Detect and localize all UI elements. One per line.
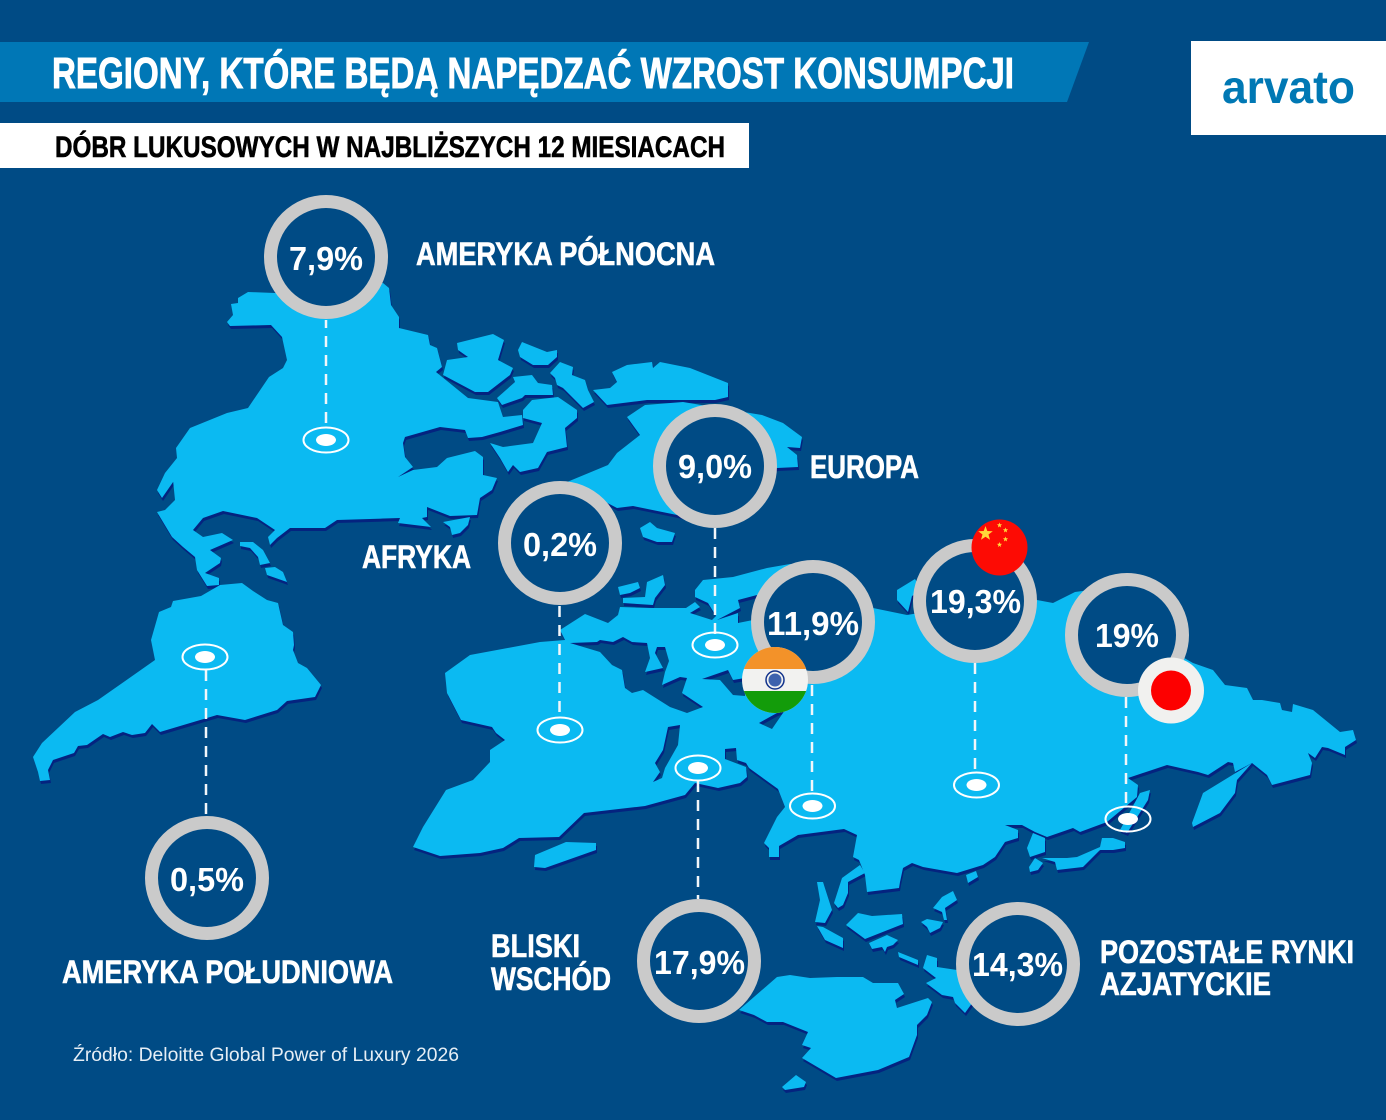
value circle: Ameryka Południowa 0,5% — [152, 822, 262, 934]
value circle: Afryka 0,2%: 0,2% — [523, 526, 597, 563]
island: south 6 — [966, 871, 978, 883]
value circle: Pozostałe rynki azjatyckie 14,3% — [962, 908, 1074, 1020]
label: Bliski Wschód — [491, 928, 611, 997]
landmass: South America — [33, 583, 321, 781]
marker: Europa — [692, 528, 738, 658]
value circle: Chiny 19,3%: 19,3% — [930, 583, 1021, 620]
landmass: Greenland-like — [567, 402, 802, 518]
value circle: Europa 9,0%: 9,0% — [678, 448, 752, 485]
island: arctic 2 — [518, 342, 557, 365]
island: east 2 — [1042, 838, 1125, 870]
marker: Indie — [790, 685, 835, 818]
logo: arvato: arvato — [1222, 61, 1355, 113]
marker: Ameryka Południowa — [182, 644, 228, 816]
island: New Guinea-like — [923, 955, 985, 1013]
island: west 1 — [618, 582, 640, 595]
world map — [33, 283, 1356, 1090]
value circle: Pozostałe rynki azjatyckie 14,3%: 14,3% — [972, 946, 1063, 983]
value circle: Japonia 19% — [1072, 580, 1182, 690]
island: thin strip — [1120, 790, 1150, 833]
island: south 2 — [869, 935, 898, 952]
marker: Ameryka Północna — [304, 320, 348, 452]
island: east 3 — [1029, 858, 1043, 872]
value circle: Chiny 19,3% — [920, 546, 1030, 656]
landmass: North America — [157, 283, 523, 586]
island: arctic narrow — [550, 362, 594, 408]
island: south 3 — [898, 952, 918, 965]
value circle: Bliski Wschód 17,9% — [644, 906, 754, 1016]
label: Ameryka Północna: AMERYKA PÓŁNOCNA — [416, 236, 715, 272]
value circle: Afryka 0,2% — [504, 488, 616, 598]
island: by Afryka label — [443, 517, 470, 535]
label: Pozostałe rynki azjatyckie — [1100, 934, 1354, 1002]
island: Tasmania-like — [782, 1075, 806, 1090]
title banner: REGIONY, KTÓRE BĘDĄ NAPĘDZAĆ WZROST KONSUMPCJI — [52, 48, 1014, 98]
logo: arvato — [1191, 41, 1386, 135]
marker: Bliski Wschód — [676, 756, 720, 899]
island: Caribbean 2 — [265, 567, 287, 582]
subtitle banner — [0, 123, 749, 168]
island: east 1 — [1027, 833, 1045, 857]
island: south 4 — [933, 891, 957, 920]
island: arctic large — [490, 397, 577, 472]
island: south 1 — [846, 913, 903, 939]
marker: Chiny — [954, 663, 999, 798]
icon: flag of Japan — [1138, 658, 1204, 724]
landmass: Eurasia and Africa — [413, 564, 1356, 892]
label: Europa: EUROPA — [810, 449, 919, 485]
island: south sliver upper — [815, 882, 832, 923]
landmass: Australia — [739, 975, 932, 1078]
label: Afryka: AFRYKA — [362, 539, 471, 575]
subtitle banner: DÓBR LUKUSOWYCH W NAJBLIŻSZYCH 12 MIESIACACH — [55, 130, 725, 164]
island: south peninsula — [834, 865, 865, 908]
icon: flag of China — [972, 520, 1028, 576]
value circle: Bliski Wschód 17,9%: 17,9% — [654, 944, 745, 981]
island: Madagascar-like — [534, 842, 596, 868]
label: Pozostałe rynki azjatyckie: AZJATYCKIE — [1100, 966, 1271, 1002]
island: north — [593, 362, 728, 405]
source note: Źródło: Deloitte Global Power of Luxury 2026 — [73, 1045, 459, 1066]
marker: Japonia — [1106, 697, 1150, 832]
island: Caribbean 1 — [240, 542, 270, 565]
value circle: Ameryka Południowa 0,5%: 0,5% — [170, 861, 244, 898]
island: south sliver lower — [817, 926, 843, 948]
icon: flag of India — [742, 647, 808, 713]
label: Bliski Wschód: BLISKI — [491, 928, 580, 964]
island: east sliver — [1192, 763, 1252, 827]
marker: Afryka — [538, 606, 582, 742]
island: small centre — [640, 522, 675, 542]
island: arctic cluster — [497, 375, 553, 405]
value circle: Ameryka Północna 7,9%: 7,9% — [289, 240, 363, 277]
island: arctic 1 — [443, 334, 513, 392]
title banner — [0, 42, 1089, 102]
value circle: Japonia 19%: 19% — [1095, 617, 1159, 654]
value circle: Europa 9,0% — [660, 410, 770, 522]
island: west 2 — [623, 575, 665, 605]
value circle: Indie 11,9%: 11,9% — [767, 605, 859, 642]
label: Bliski Wschód: WSCHÓD — [491, 961, 611, 997]
peninsula: Arctic Asia — [897, 579, 922, 612]
value circle: Indie 11,9% — [758, 566, 868, 678]
value circle: Ameryka Północna 7,9% — [270, 202, 382, 312]
label: Ameryka Południowa: AMERYKA POŁUDNIOWA — [62, 954, 393, 990]
island: south 5 — [921, 919, 943, 933]
